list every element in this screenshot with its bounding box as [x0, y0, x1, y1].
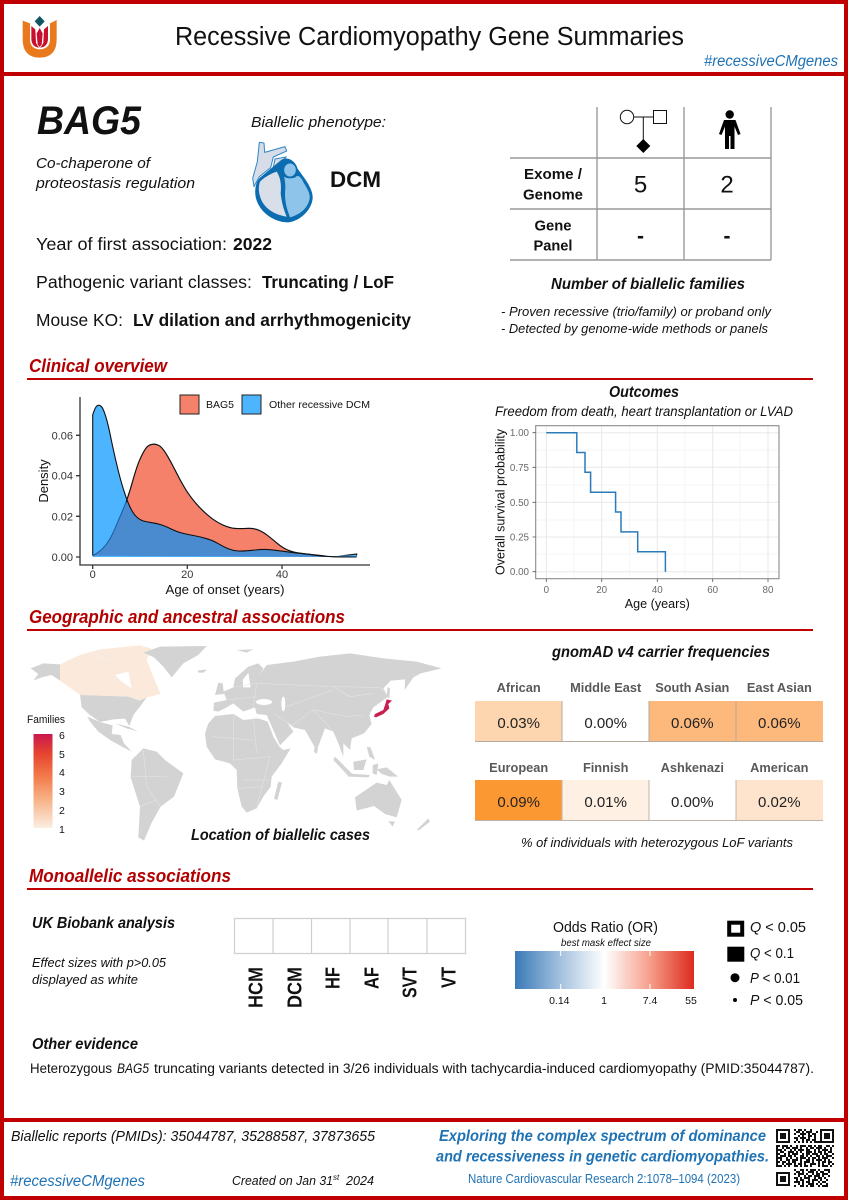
legend: Other recessive DCM	[269, 399, 370, 411]
survival y title: Overall survival probability	[494, 428, 508, 575]
gnomad row two: 0.00%	[671, 794, 714, 811]
significance legend: P < 0.01	[750, 970, 800, 987]
x axis labels: 20	[181, 569, 193, 581]
survival x labels: 20	[596, 585, 608, 596]
map legend: 1	[59, 824, 65, 836]
row label: exome genome	[523, 166, 583, 204]
other evidence text: BAG5	[117, 1061, 149, 1076]
table notes	[501, 304, 772, 336]
significance legend	[727, 919, 806, 1009]
other evidence heading: Other evidence	[32, 1036, 138, 1053]
UK Biobank note	[32, 955, 167, 987]
odds ratio legend: 0.14	[549, 995, 570, 1007]
year of first association: 2022	[233, 234, 272, 254]
x axis labels: 40	[276, 569, 288, 581]
gnomad row two	[475, 760, 823, 821]
survival x labels: 40	[652, 585, 663, 596]
significance legend: Q < 0.05	[750, 919, 806, 936]
footer: created date: st	[333, 1173, 340, 1182]
footer: journal citation: Nature Cardiovascular Research 2:1078–1094 (2023)	[468, 1171, 740, 1186]
value: exome families: 5	[634, 172, 647, 198]
gnomad note: % of individuals with heterozygous LoF variants	[521, 835, 793, 850]
value: panel probands: -	[724, 225, 730, 248]
icon: logo	[23, 16, 57, 58]
odds ratio legend: 7.4	[643, 995, 657, 1007]
panel: number of biallelic families table	[510, 107, 771, 260]
x axis title: Age of onset (years)	[166, 582, 284, 597]
phenotype name: DCM	[330, 167, 381, 192]
gnomad title: gnomAD v4 carrier frequencies	[551, 644, 770, 661]
odds ratio legend: 1	[601, 995, 607, 1007]
survival chart	[494, 426, 779, 611]
other evidence text: Heterozygous	[30, 1061, 112, 1076]
heading: monoallelic associations: Monoallelic associations	[29, 865, 231, 886]
footer: biallelic reports: Biallelic reports (PMIDs): 35044787, 35288587, 37873655	[11, 1128, 376, 1145]
survival y labels: 0.25	[510, 532, 530, 544]
y axis labels: 0.02	[52, 511, 73, 523]
survival x title: Age (years)	[625, 597, 690, 611]
UK Biobank heatmap: DCM	[284, 967, 306, 1008]
UK Biobank note: Effect sizes with p>0.05	[32, 955, 167, 970]
footer: hashtag: #recessiveCMgenes	[10, 1173, 145, 1190]
gnomad row two: 0.01%	[584, 794, 627, 811]
survival y labels: 1.00	[510, 428, 530, 439]
table notes: - Proven recessive (trio/family) or proband only	[501, 304, 772, 319]
panel: gene summary	[35, 99, 411, 330]
footer: created date: Created on Jan 31	[232, 1173, 333, 1188]
gnomad row one: 0.03%	[497, 715, 540, 732]
map legend: 2	[59, 805, 65, 817]
legend	[180, 395, 370, 414]
UK Biobank heatmap: HF	[322, 967, 344, 989]
other evidence text: truncating variants detected in 3/26 individuals with tachycardia-induced cardiomyopathy (PMID:35044787).	[154, 1061, 814, 1076]
footer: paper title	[436, 1128, 769, 1166]
panel: outcomes	[494, 384, 793, 611]
icon: QR code	[776, 1130, 834, 1186]
gene function: Co-chaperone of	[36, 155, 152, 172]
survival y labels: 0.75	[510, 463, 530, 474]
y axis labels: 0.06	[52, 430, 73, 442]
row label: gene panel	[534, 218, 572, 254]
row label: gene panel: Panel	[534, 238, 572, 254]
gnomad row two: Ashkenazi	[661, 760, 724, 775]
gnomad row one: 0.06%	[758, 715, 801, 732]
map legend	[27, 714, 65, 836]
value: exome probands: 2	[720, 172, 734, 198]
density chart	[36, 395, 370, 597]
row label: exome genome: Genome	[523, 186, 583, 204]
UK Biobank heatmap: AF	[362, 967, 384, 989]
icon: person	[719, 110, 740, 149]
UK Biobank heatmap: VT	[438, 967, 460, 988]
y axis labels: 0.00	[52, 552, 73, 564]
world map	[31, 645, 442, 841]
variant classes: Pathogenic variant classes:	[36, 272, 252, 292]
gnomad row one: East Asian	[747, 680, 812, 695]
y axis labels: 0.04	[52, 471, 73, 483]
gnomad row two: 0.02%	[758, 794, 801, 811]
odds ratio legend: 55	[685, 995, 697, 1007]
odds ratio legend	[515, 919, 697, 1007]
survival y labels	[510, 428, 530, 578]
survival x labels: 0	[544, 585, 550, 596]
title: Recessive Cardiomyopathy Gene Summaries	[175, 23, 684, 51]
icon: heart	[253, 142, 313, 222]
row label: gene panel: Gene	[534, 218, 572, 234]
survival y labels: 0.50	[510, 498, 530, 509]
gnomad row two: European	[489, 760, 548, 775]
gnomad row one	[475, 680, 823, 742]
x axis labels: 0	[90, 569, 96, 581]
UK Biobank note: displayed as white	[32, 972, 138, 987]
gene name: BAG5	[37, 99, 142, 143]
footer: paper title: and recessiveness in genetic cardiomyopathies.	[436, 1148, 769, 1166]
UK Biobank heatmap: SVT	[400, 967, 422, 998]
significance legend: P < 0.05	[750, 992, 803, 1009]
UK Biobank heading: UK Biobank analysis	[32, 915, 175, 932]
hashtag: #recessiveCMgenes	[704, 53, 838, 70]
map legend: 3	[59, 786, 65, 798]
survival x labels: 80	[763, 585, 774, 596]
gnomad row two: American	[750, 760, 809, 775]
x axis labels	[90, 569, 288, 581]
survival y labels: 0.00	[510, 567, 530, 578]
table notes: - Detected by genome-wide methods or panels	[501, 321, 768, 336]
gnomad row one: 0.00%	[584, 715, 627, 732]
panel: gnomAD carrier frequencies	[475, 644, 823, 850]
gnomad row two: 0.09%	[497, 794, 540, 811]
map legend: 5	[59, 749, 65, 761]
table caption: Number of biallelic families	[551, 276, 745, 293]
map legend: 6	[59, 730, 65, 742]
footer: created date: 2024	[345, 1173, 374, 1188]
icon: pedigree trio	[620, 110, 666, 153]
map legend: Families	[27, 714, 65, 726]
year of first association: Year of first association:	[36, 234, 227, 254]
gnomad row one: Middle East	[570, 680, 642, 695]
gene function: proteostasis regulation	[35, 175, 195, 192]
map caption: Location of biallelic cases	[191, 827, 370, 844]
legend: BAG5	[206, 399, 234, 411]
map legend: 4	[59, 767, 65, 779]
y axis title: Density	[36, 459, 51, 503]
UK Biobank heatmap: HCM	[246, 967, 268, 1008]
gnomad row one: African	[497, 680, 541, 695]
outcomes subtitle: Freedom from death, heart transplantation or LVAD	[495, 404, 793, 419]
variant classes	[36, 272, 394, 292]
japan	[374, 699, 392, 717]
heading: geographic and ancestral associations: Geographic and ancestral associations	[29, 606, 345, 627]
y axis labels	[52, 430, 73, 564]
gnomad row one: 0.06%	[671, 715, 714, 732]
mouse knockout: Mouse KO:	[36, 310, 123, 330]
gnomad row two: Finnish	[583, 760, 629, 775]
odds ratio legend: Odds Ratio (OR)	[553, 919, 658, 936]
canada	[60, 645, 161, 701]
odds ratio legend: best mask effect size	[561, 938, 651, 949]
UK Biobank heatmap	[234, 918, 466, 1008]
gnomad row one: South Asian	[655, 680, 730, 695]
phenotype label: Biallelic phenotype:	[251, 114, 386, 131]
heading: clinical overview: Clinical overview	[29, 355, 168, 376]
outcomes title: Outcomes	[609, 384, 679, 401]
footer: paper title: Exploring the complex spectrum of dominance	[439, 1128, 766, 1145]
survival x labels	[544, 585, 774, 596]
survival x labels: 60	[707, 585, 719, 596]
value: panel families: -	[637, 225, 644, 248]
row label: exome genome: Exome /	[524, 166, 583, 183]
significance legend: Q < 0.1	[750, 945, 794, 962]
gene function	[35, 155, 195, 192]
variant classes: Truncating / LoF	[262, 272, 394, 292]
mouse knockout: LV dilation and arrhythmogenicity	[133, 310, 411, 330]
